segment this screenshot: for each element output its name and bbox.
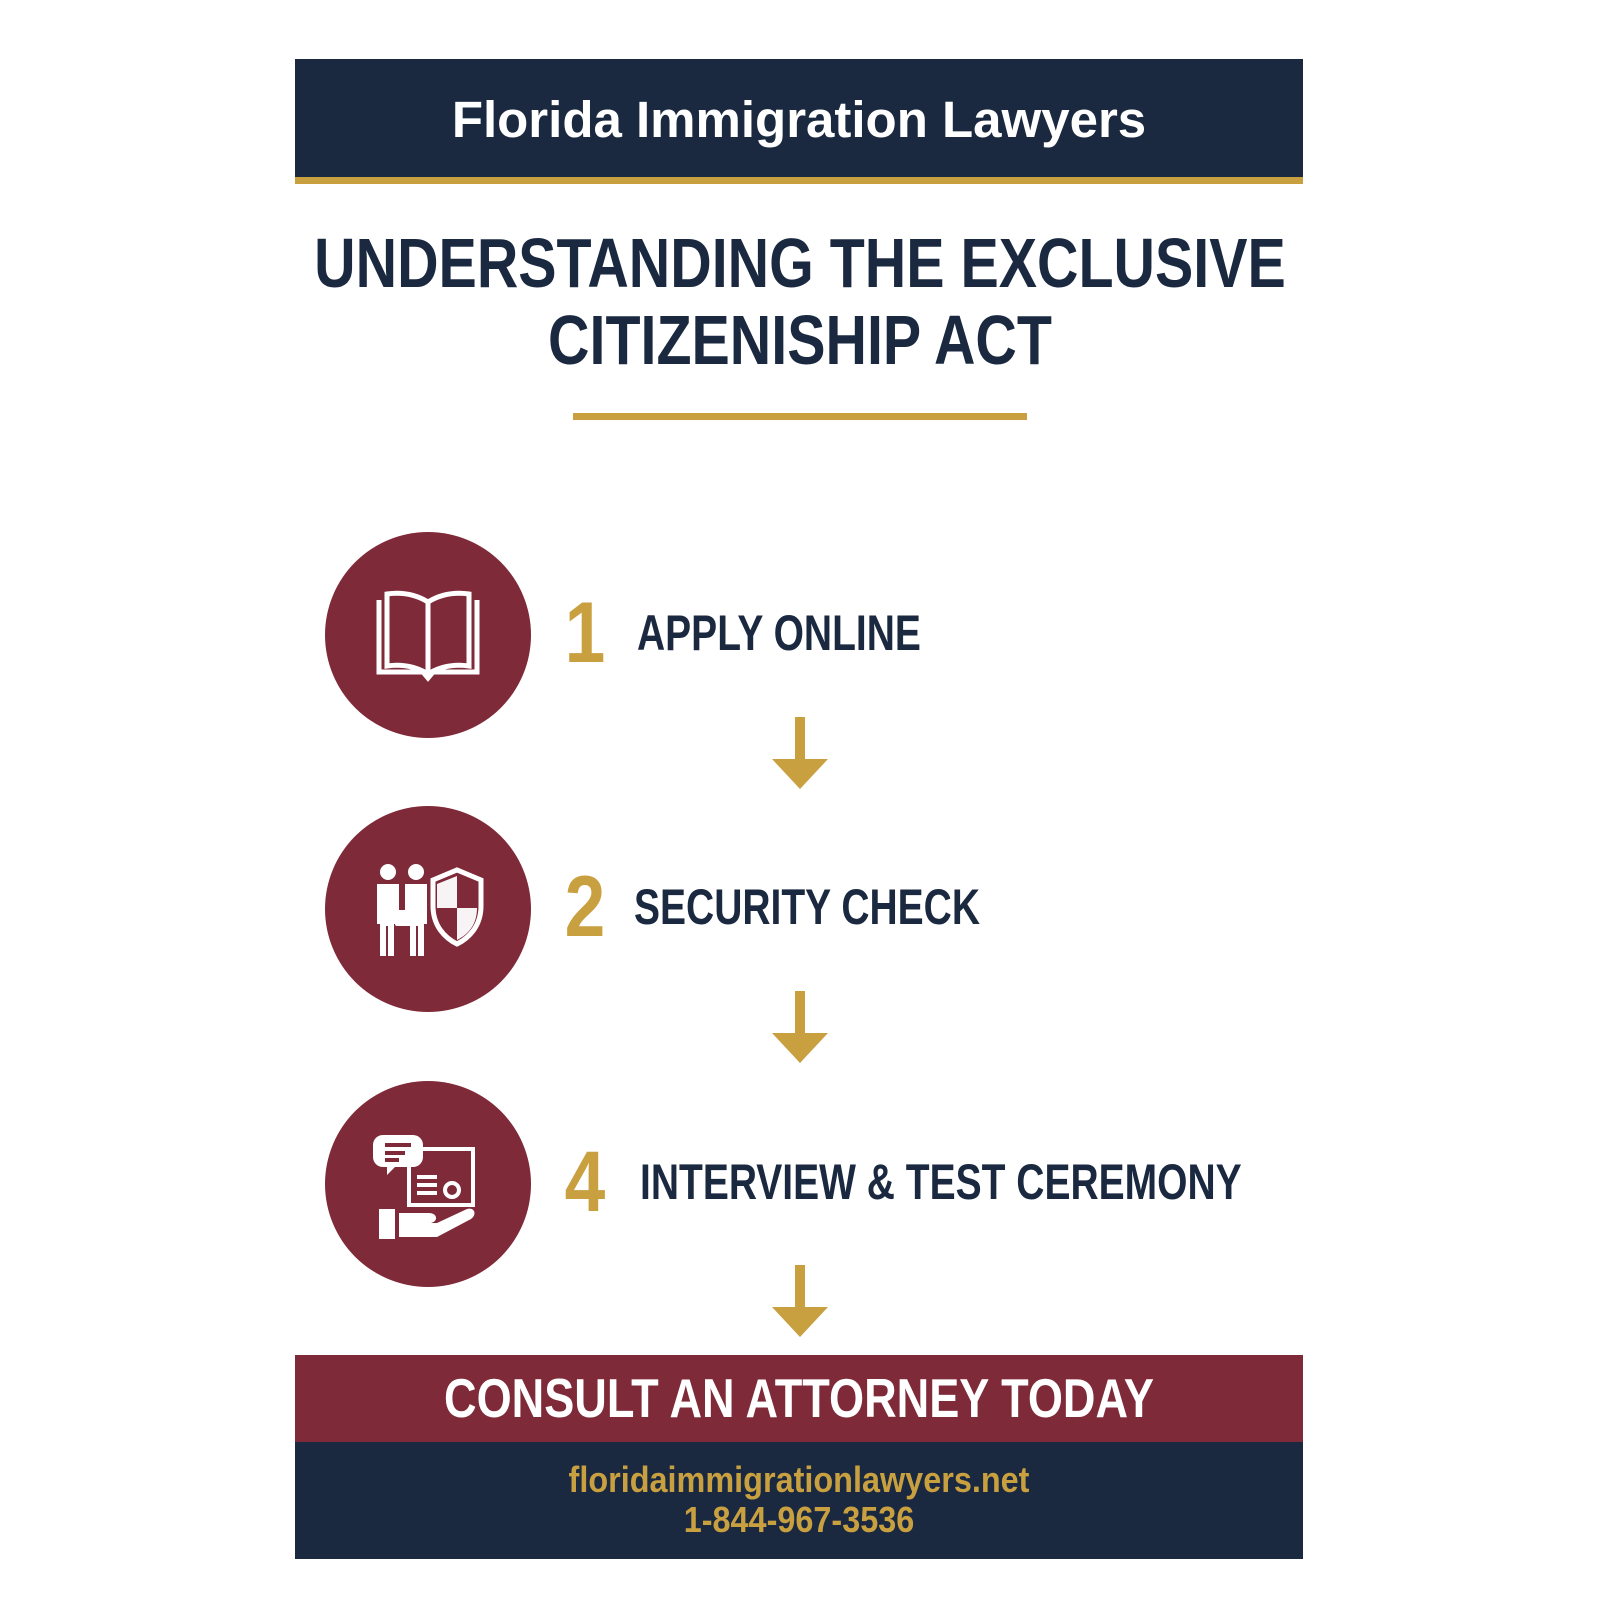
cta banner (295, 1355, 1303, 1442)
label: SECURITY CHECK (634, 879, 980, 935)
icon: certificate & hand (325, 1081, 531, 1287)
number 1: 1 (565, 585, 605, 681)
step 1 (325, 532, 921, 738)
title: UNDERSTANDING THE EXCLUSIVE (314, 224, 1286, 302)
header bar (295, 59, 1303, 184)
title underline (573, 413, 1027, 420)
title: CITIZENISHIP ACT (548, 301, 1052, 379)
icon: book (325, 532, 531, 738)
arrow 1 (772, 717, 828, 789)
number 2: 2 (565, 859, 605, 955)
contact info: 1-844-967-3536 (684, 1499, 914, 1540)
step 2 (325, 806, 980, 1012)
icon: people & shield (325, 806, 531, 1012)
footer panel (295, 1355, 1303, 1559)
label: INTERVIEW & TEST CEREMONY (640, 1154, 1242, 1210)
header text: Florida Immigration Lawyers (452, 91, 1146, 148)
label: APPLY ONLINE (637, 605, 921, 661)
step 4 (325, 1081, 1242, 1287)
cta banner: CONSULT AN ATTORNEY TODAY (444, 1367, 1154, 1429)
arrow 3 (772, 1265, 828, 1337)
number 4: 4 (565, 1134, 605, 1230)
contact info (295, 1442, 1303, 1559)
arrow 2 (772, 991, 828, 1063)
title (314, 224, 1286, 379)
contact info: floridaimmigrationlawyers.net (569, 1459, 1029, 1500)
